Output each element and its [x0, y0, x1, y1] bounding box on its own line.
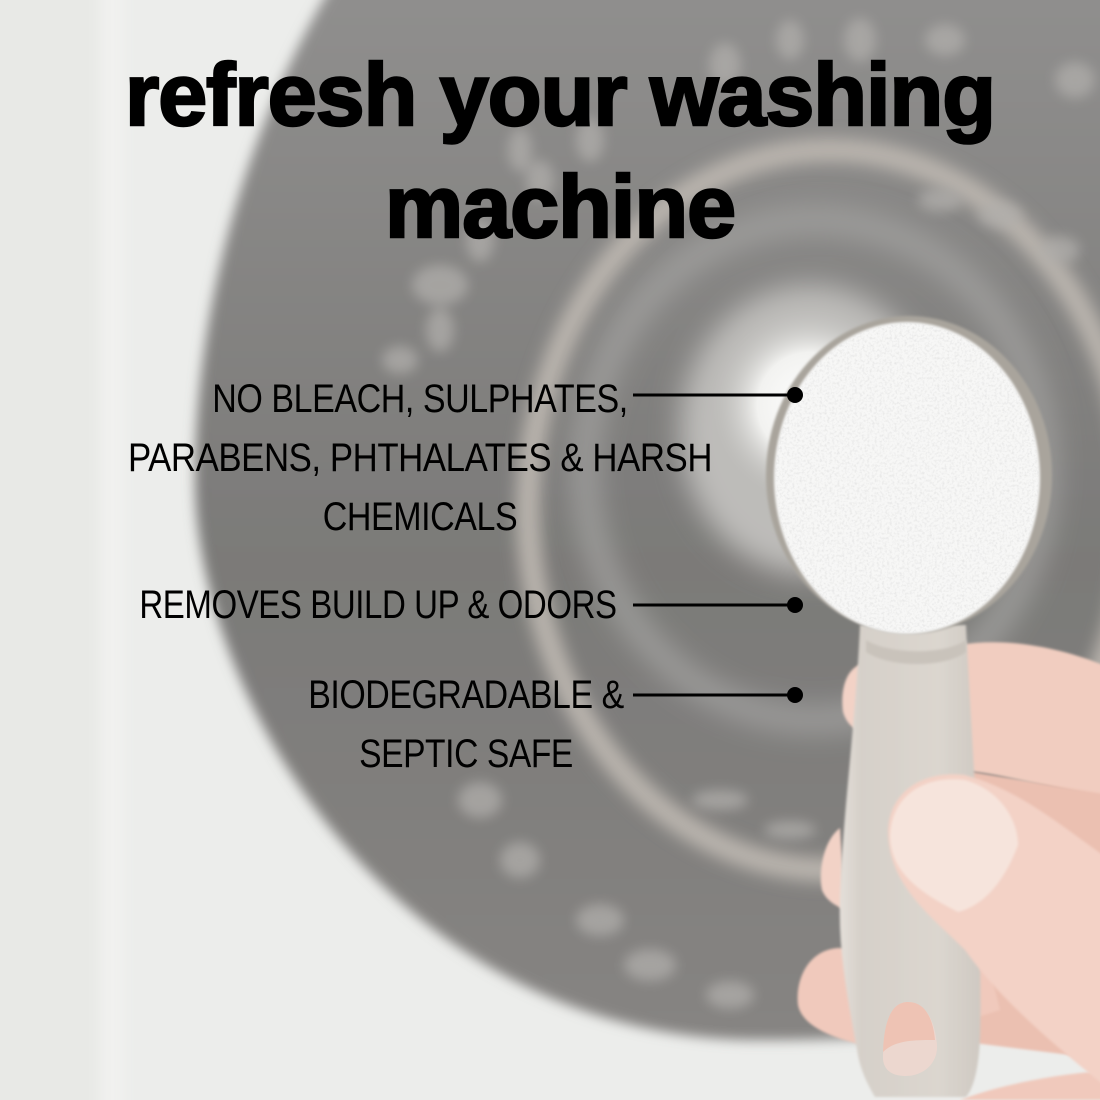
callout text: biodegradable: BIODEGRADABLE & [308, 673, 624, 717]
callout text: no bleach: NO BLEACH, SULPHATES, [212, 377, 628, 421]
leader line 2 [633, 597, 803, 613]
thumb [888, 774, 1100, 1090]
spoon hole [883, 1002, 937, 1076]
callout text: no bleach: PARABENS, PHTHALATES & HARSH [128, 436, 712, 480]
measuring spoon bowl with salt [766, 316, 1052, 640]
leader line 3 [633, 687, 803, 703]
callout text: biodegradable: SEPTIC SAFE [359, 732, 573, 776]
measuring spoon handle [840, 625, 981, 1097]
callout text: biodegradable [308, 673, 624, 776]
back fingers [960, 642, 1100, 800]
title [125, 45, 995, 256]
callout text: removes build up: REMOVES BUILD UP & ODORS [139, 583, 617, 627]
callout text: no bleach: CHEMICALS [323, 495, 517, 539]
hand [798, 642, 1100, 1100]
drum [195, 0, 1100, 1040]
leader line 1 [633, 387, 803, 403]
left wall strip [0, 0, 124, 1100]
drum inner rings [528, 150, 1100, 870]
title: machine [385, 157, 735, 256]
title: refresh your washing [125, 45, 995, 144]
callout text: no bleach [128, 377, 712, 539]
drum holes [382, 18, 1095, 1009]
